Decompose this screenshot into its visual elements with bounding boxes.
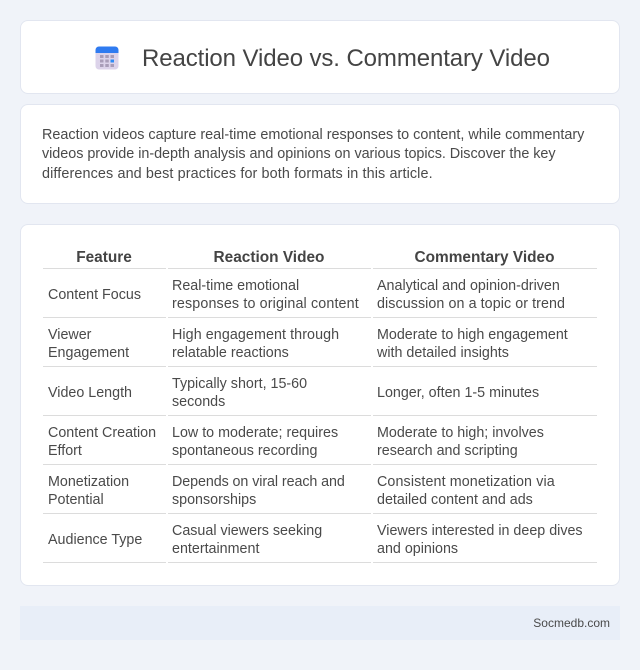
footer xyxy=(20,606,620,640)
comparison table: spontaneous recording xyxy=(172,443,317,459)
comparison table: Longer, often 1-5 minutes xyxy=(377,385,539,401)
comparison table: Content Creation xyxy=(48,425,156,441)
comparison table: responses to original content xyxy=(172,296,359,312)
comparison table: Feature xyxy=(76,249,132,266)
comparison table: Consistent monetization via xyxy=(377,474,555,490)
comparison table: research and scripting xyxy=(377,443,518,459)
footer credit: Socmedb.com xyxy=(533,616,610,630)
comparison table: Moderate to high; involves xyxy=(377,425,544,441)
comparison table: entertainment xyxy=(172,541,259,557)
intro paragraph: differences and best practices for both formats in this article. xyxy=(42,166,433,182)
panel: title card xyxy=(20,20,620,94)
comparison table: Video Length xyxy=(48,385,132,401)
icon: calendar xyxy=(96,46,118,70)
comparison table: Depends on viral reach and xyxy=(172,474,345,490)
comparison table: Moderate to high engagement xyxy=(377,327,568,343)
intro paragraph: videos provide in-depth analysis and opinions on various topics. Discover the key xyxy=(42,146,556,162)
comparison table: with detailed insights xyxy=(377,345,509,361)
comparison table: and opinions xyxy=(377,541,458,557)
comparison table: Potential xyxy=(48,492,104,508)
intro paragraph: Reaction videos capture real-time emotional responses to content, while commentary xyxy=(42,127,584,143)
intro paragraph xyxy=(42,127,584,182)
comparison table: High engagement through xyxy=(172,327,339,343)
comparison table: Commentary Video xyxy=(414,249,554,266)
comparison table: Analytical and opinion-driven xyxy=(377,278,560,294)
comparison table: Real-time emotional xyxy=(172,278,299,294)
comparison table: Low to moderate; requires xyxy=(172,425,338,441)
comparison table: Audience Type xyxy=(48,532,142,548)
panel: comparison table xyxy=(20,224,620,586)
comparison table: Monetization xyxy=(48,474,129,490)
comparison table: Content Focus xyxy=(48,287,141,303)
comparison table: Viewer xyxy=(48,327,91,343)
comparison table: detailed content and ads xyxy=(377,492,533,508)
comparison table: Casual viewers seeking xyxy=(172,523,322,539)
comparison table: discussion on a topic or trend xyxy=(377,296,565,312)
comparison table: seconds xyxy=(172,394,225,410)
comparison table: Reaction Video xyxy=(214,249,324,266)
title: Reaction Video vs. Commentary Video xyxy=(142,45,550,72)
comparison table: Viewers interested in deep dives xyxy=(377,523,583,539)
comparison table: Engagement xyxy=(48,345,129,361)
comparison table: Effort xyxy=(48,443,82,459)
comparison table: relatable reactions xyxy=(172,345,289,361)
panel: intro text xyxy=(20,104,620,204)
comparison table: Typically short, 15-60 xyxy=(172,376,307,392)
comparison table: sponsorships xyxy=(172,492,256,508)
